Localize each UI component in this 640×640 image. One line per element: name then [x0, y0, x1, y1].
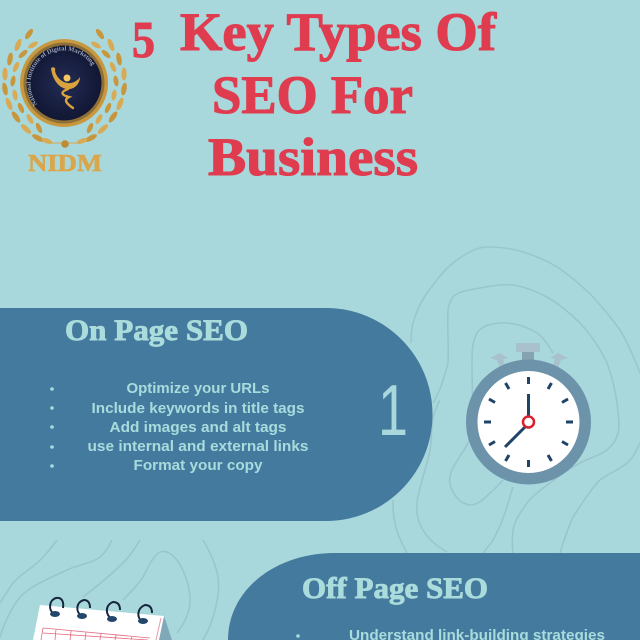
- title: [132, 2, 497, 187]
- list: on page tips: Add images and alt tags: [110, 420, 286, 436]
- panel: off page SEO: [228, 553, 640, 640]
- panel: on page SEO: [0, 308, 433, 521]
- icon: stopwatch: [466, 343, 591, 484]
- title: SEO For: [212, 65, 413, 125]
- icon: NIDM logo: [2, 28, 127, 177]
- logo wordmark: NIDM: [28, 151, 102, 177]
- calendar grid: [41, 628, 150, 640]
- list: on page tips: Optimize your URLs: [126, 381, 270, 397]
- badge: [20, 39, 108, 127]
- title: Key Types Of: [180, 2, 497, 62]
- icon: NIDM logo: National Institute of Digital Marketing: [26, 46, 95, 107]
- title: 5: [132, 12, 155, 69]
- list: on page tips: use internal and external links: [88, 439, 308, 455]
- number 1: 1: [378, 371, 408, 451]
- laurel wreath: [1, 28, 128, 148]
- icon: calendar: [33, 598, 172, 640]
- title: Business: [208, 127, 418, 187]
- list: on page tips: Format your copy: [134, 458, 262, 474]
- heading: off page SEO: Off Page SEO: [302, 572, 488, 605]
- list: on page tips: Include keywords in title tags: [92, 401, 304, 417]
- heading: on page SEO: On Page SEO: [65, 314, 248, 347]
- list: on page tips: [50, 381, 308, 474]
- calendar rings: [50, 598, 152, 622]
- badge ring text: [30, 50, 98, 105]
- clock hands: [505, 394, 528, 447]
- lamp emblem: [51, 67, 80, 108]
- clock ticks: [484, 377, 573, 467]
